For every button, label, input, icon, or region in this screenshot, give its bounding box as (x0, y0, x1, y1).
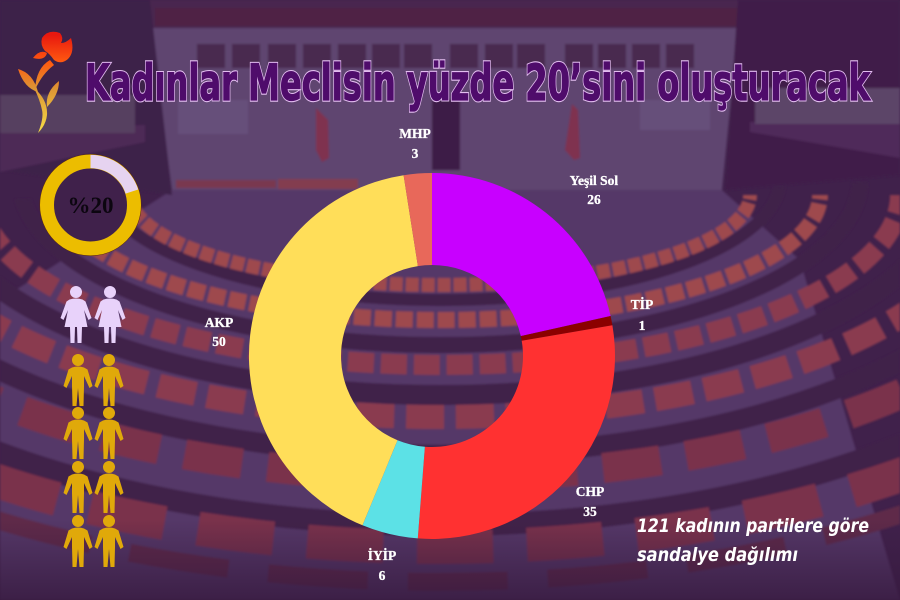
label: CHP: 35 (583, 504, 597, 519)
icons: women row (60, 286, 126, 343)
label: AKP: AKP (205, 315, 233, 330)
slice: CHP (418, 325, 615, 539)
label: MHP: MHP (399, 126, 431, 141)
label: İYİP: İYİP (368, 548, 396, 563)
label: TİP: TİP (631, 297, 653, 312)
donut chart: seats by party (249, 173, 615, 539)
icons: men rows (64, 354, 124, 567)
label: MHP: 3 (412, 146, 419, 161)
label: Yeşil Sol: Yeşil Sol (570, 173, 618, 188)
label: AKP: 50 (212, 334, 226, 349)
label: CHP: CHP (576, 484, 604, 499)
slice: İYİP (362, 440, 425, 538)
caption (637, 515, 869, 566)
ring chart: 20 percent (40, 154, 142, 256)
label: TİP: 1 (639, 318, 646, 333)
slice: TİP (521, 316, 612, 341)
seats drawn as wide dashed arcs (0, 170, 900, 582)
ring label: %20 (68, 193, 114, 218)
slice: Yeşil Sol (432, 173, 611, 336)
label: Yeşil Sol: 26 (587, 192, 601, 207)
slice: AKP (249, 175, 418, 525)
slice: MHP (404, 173, 432, 266)
label: İYİP: 6 (379, 568, 386, 583)
icon: rose and wheat logo (18, 32, 72, 133)
caption: sandalye dağılımı (637, 544, 798, 566)
